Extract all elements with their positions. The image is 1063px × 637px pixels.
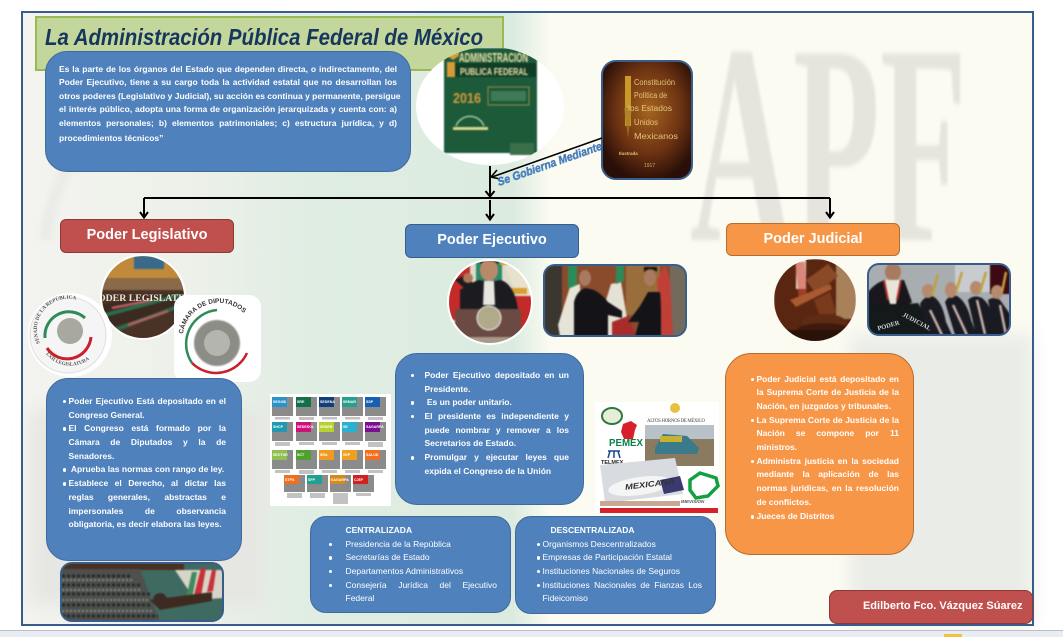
credit: author: Edilberto Fco. Vázquez Súarez xyxy=(863,600,1022,612)
icon: book Administración Pública Federal xyxy=(416,47,564,165)
icon: book Administración Pública Federal: PUBLICA FEDERAL xyxy=(460,66,528,78)
panel: Descentralizada: Fideicomiso xyxy=(542,593,588,603)
panel: Descentralizada: Instituciones Nacionales de Fianzas Los xyxy=(542,580,702,590)
panel: Poder Judicial text: ministros. xyxy=(756,442,797,452)
heading: Poder Judicial: Poder Judicial xyxy=(763,231,863,247)
label: Se Gobierna Mediante: Se Gobierna Mediante xyxy=(496,141,604,189)
image: Secretarías de Estado grid: SEMAR xyxy=(343,400,356,404)
panel: Centralizada: Secretarías de Estado xyxy=(346,552,430,562)
panel: Descentralizada: DESCENTRALIZADA xyxy=(550,525,635,535)
image: Secretarías de Estado grid: SALUD xyxy=(366,453,379,457)
panel: Poder Judicial text: mediante la aplicación de las xyxy=(756,469,899,479)
image: Secretarías de Estado grid: CJEF xyxy=(354,478,364,482)
image: paraestatales logos collage: IMEVISIÓN xyxy=(681,498,705,504)
photo: Poder Judicial justices: JUDICIAL xyxy=(901,312,933,333)
panel: Poder Ejecutivo text: El presidente es independiente y xyxy=(424,411,569,421)
icon: Constitución book: los Estados xyxy=(628,104,672,113)
panel: definition xyxy=(45,51,411,172)
panel: Poder Judicial text: Poder Judicial está depositado en xyxy=(756,374,899,384)
icon: Constitución book: Política de xyxy=(634,91,667,100)
panel: Poder Ejecutivo text: Secretarios de Estado. xyxy=(424,438,516,448)
image: Secretarías de Estado grid: STPS xyxy=(285,478,295,482)
panel: Poder Judicial text: Nación se compone por 11 xyxy=(756,428,899,438)
panel: Poder Judicial text: de conflictos. xyxy=(756,497,811,507)
panel: definition: Es la parte de los órganos del Estado que dependen directa, o indirectamente, del xyxy=(59,64,397,74)
logo: Cámara de Diputados: CÁMARA DE DIPUTADOS xyxy=(178,298,246,334)
image: Secretarías de Estado grid: SEDENA xyxy=(320,400,335,404)
panel: definition: el interés público, adopta una forma de organización jerarquizada y cuenta con: a) xyxy=(59,104,397,114)
image: Secretarías de Estado grid: SRE xyxy=(297,400,305,404)
panel: Poder Judicial text: la Suprema Corte de Justicia de la xyxy=(756,387,899,397)
panel: Poder Legislativo text: Senadores. xyxy=(68,451,114,461)
panel: Centralizada xyxy=(310,516,511,613)
icon: book Administración Pública Federal: 2016 xyxy=(453,90,481,107)
photo: Poder Legislativo circle xyxy=(100,254,186,340)
panel: Poder Ejecutivo text xyxy=(395,353,584,505)
panel: Poder Ejecutivo text: puede nombrar y remover a los xyxy=(424,425,569,435)
logo: Senado de la República: SENADO DE LA REPÚBLICA xyxy=(34,295,76,344)
panel: Poder Ejecutivo text: Promulgar y ejecutar leyes que xyxy=(424,452,569,462)
icon: Constitución book: 1917 xyxy=(644,163,655,169)
image: Secretarías de Estado grid: SE xyxy=(343,425,348,429)
image: paraestatales logos collage: ALTOS HORNOS DE MÉXICO xyxy=(647,418,706,424)
title banner xyxy=(35,16,504,71)
panel: Poder Ejecutivo text: expida el Congreso de la Unión xyxy=(424,466,551,476)
image: Secretarías de Estado grid: SENER xyxy=(320,425,333,429)
logo: Senado de la República xyxy=(28,293,112,377)
panel: Centralizada: Federal xyxy=(346,593,374,603)
image: Secretarías de Estado grid: SEDESOL xyxy=(297,425,315,429)
panel: Poder Legislativo text: Congreso General. xyxy=(68,410,145,420)
icon: book Administración Pública Federal: ADMINISTRACIÓN xyxy=(459,50,528,65)
icon: Constitución book xyxy=(602,61,692,179)
image: Secretarías de Estado grid: SRA xyxy=(320,453,328,457)
panel: Centralizada: Presidencia de la República xyxy=(346,539,451,549)
panel: Poder Legislativo text: obligatoria, es decir elabora las leyes. xyxy=(68,519,222,529)
icon: Constitución book: Constitución xyxy=(634,78,675,87)
heading: Poder Judicial xyxy=(726,223,900,256)
panel: Descentralizada xyxy=(515,516,716,614)
photo: Poder Judicial justices: PODER xyxy=(877,319,901,332)
image: Secretarías de Estado grid: SHCP xyxy=(273,425,284,429)
panel: Poder Judicial text: Nación, en juzgados y tribunales. xyxy=(756,401,891,411)
panel: definition: otros poderes (Legislativo y Judicial), su acción es continua y permanente, persigue xyxy=(59,91,401,101)
photo: gavel circle xyxy=(774,259,856,342)
image: Secretarías de Estado grid xyxy=(270,394,391,506)
logo: Senado de la República: LXII LEGISLATURA xyxy=(46,352,90,366)
panel: Centralizada: CENTRALIZADA xyxy=(346,525,412,535)
photo: President circle xyxy=(447,257,533,345)
panel: definition: procedimientos técnicos” xyxy=(59,133,163,143)
panel: Poder Legislativo text: El Congreso está formado por la xyxy=(68,423,226,433)
panel: Poder Judicial text: Jueces de Distritos xyxy=(756,511,834,521)
panel: Poder Legislativo text: Poder Ejecutivo Está depositado en el xyxy=(68,396,226,406)
arrows: tree connector xyxy=(140,166,834,220)
photo: Poder Legislativo circle: PODER LEGISLATIVO xyxy=(92,293,197,304)
panel: Descentralizada: Organismos Descentralizados xyxy=(542,539,656,549)
panel: Descentralizada: Instituciones Nacionales de Seguros xyxy=(542,566,680,576)
panel: Centralizada: Consejería Jurídica del Ejecutivo xyxy=(346,580,497,590)
image: Secretarías de Estado grid: SEP xyxy=(343,453,351,457)
image: Secretarías de Estado grid: SCT xyxy=(297,453,305,457)
panel: Poder Legislativo text: reglas generales, abstractas e xyxy=(68,492,226,502)
panel: Poder Ejecutivo text: Poder Ejecutivo depositado en un xyxy=(424,370,569,380)
heading: Poder Legislativo xyxy=(60,219,234,253)
panel: Poder Judicial text: La Suprema Corte de Justicia de la xyxy=(756,415,899,425)
panel: definition: Poder Ejecutivo, tiene a su cargo toda la actividad estatal que no desarrollan los xyxy=(59,77,397,87)
panel: Centralizada: Departamentos Administrativos xyxy=(346,566,463,576)
icon: Constitución book: Ilustrada xyxy=(619,151,638,156)
panel: Descentralizada: Empresas de Participación Estatal xyxy=(542,552,672,562)
image: Secretarías de Estado grid: SSP xyxy=(366,400,374,404)
panel: definition: elementos personales; b) elementos patrimoniales; c) estructura jurídica, y d) xyxy=(59,118,397,128)
image: Secretarías de Estado grid: SECTUR xyxy=(273,453,288,457)
title: La Administración Pública Federal de México xyxy=(45,24,483,50)
panel: Poder Ejecutivo text: Presidente. xyxy=(424,384,470,394)
panel: Poder Legislativo text: Cámara de Diputados y la de xyxy=(68,437,226,447)
panel: Poder Legislativo text: impersonales de observancia xyxy=(68,506,226,516)
icon: Constitución book: Mexicanos xyxy=(634,132,678,141)
image: paraestatales logos collage xyxy=(595,402,719,513)
image: Secretarías de Estado grid: SAGARPA xyxy=(331,478,349,482)
panel: Poder Judicial text xyxy=(725,353,914,555)
image: paraestatales logos collage: TELMEX. xyxy=(601,460,625,466)
icon: Constitución book: Unidos xyxy=(634,118,658,127)
image: Secretarías de Estado grid: SFP xyxy=(308,478,316,482)
panel: Poder Legislativo text: Establece el Derecho, al dictar las xyxy=(68,478,226,488)
image: paraestatales logos collage: MEXICANA xyxy=(625,477,675,492)
panel: Poder Legislativo text: Aprueba las normas con rango de ley. xyxy=(71,464,224,474)
panel: Poder Judicial text: Administra justicia en la sociedad xyxy=(756,456,899,466)
photo: Congreso chamber xyxy=(60,562,224,622)
photo: presidential sash handover xyxy=(544,265,686,336)
panel: Poder Ejecutivo text: Es un poder unitario. xyxy=(427,397,512,407)
heading: Poder Ejecutivo xyxy=(405,224,579,258)
image: paraestatales logos collage: PEMEX xyxy=(609,438,643,449)
arrow: Constitución to trunk xyxy=(491,138,602,179)
heading: Poder Ejecutivo: Poder Ejecutivo xyxy=(437,232,547,248)
heading: Poder Legislativo: Poder Legislativo xyxy=(87,227,207,243)
credit: author xyxy=(829,590,1033,624)
image: Secretarías de Estado grid: SEGOB xyxy=(273,400,286,404)
panel: Poder Judicial text: normas jurídicas, en la resolución xyxy=(756,483,899,493)
panel: Poder Legislativo text xyxy=(46,378,242,561)
photo: Poder Judicial justices xyxy=(868,263,1010,336)
logo: Cámara de Diputados xyxy=(174,295,261,382)
image: Secretarías de Estado grid: SAGARPA xyxy=(366,425,384,429)
